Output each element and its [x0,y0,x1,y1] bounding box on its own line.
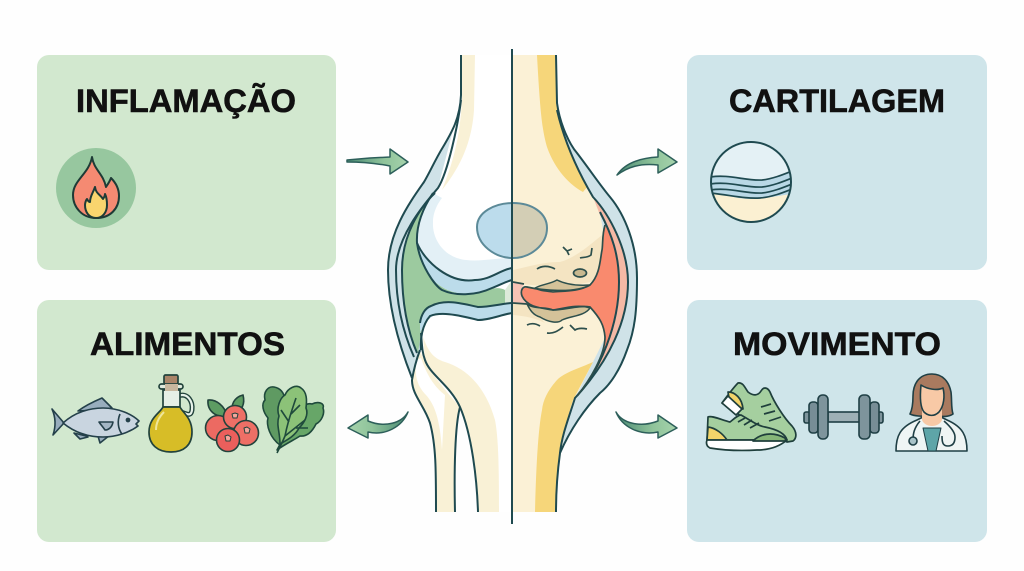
joint diagram [388,49,637,524]
joint space pink [513,282,526,303]
left half: healthy joint [388,55,512,512]
icon: flame [56,148,136,228]
panel: alimentos [37,300,336,542]
healthy femur [417,55,512,281]
fibula [412,350,460,512]
center divider [511,49,513,524]
bone shading [513,235,602,323]
pale synovium band [575,197,628,398]
icon: olive oil bottle [149,375,192,452]
heading: cartilagem: CARTILAGEM [729,83,945,119]
heading: movimento: MOVIMENTO [733,326,941,362]
arrow: inflamação to joint [347,149,408,174]
synovial green area [402,190,505,353]
panel: cartilagem [687,55,987,270]
healthy capsule [388,55,461,378]
inflamed synovium [521,225,619,396]
right half: arthritic joint [513,55,637,512]
yellow marrow stripes [537,55,587,192]
arthritic outlines [556,55,637,512]
arthritic capsule [556,55,637,512]
arrow: joint to alimentos [348,412,408,438]
panel: inflamação [37,55,336,270]
heading: inflamação: INFLAMAÇÃO [76,82,296,119]
healthy tibia [421,313,512,512]
patella [477,203,547,258]
panel: movimento [687,300,987,542]
icon: cartilage sphere [710,140,792,225]
icon: spinach leaves [263,386,324,453]
arthritic bone [513,55,605,512]
icon: fish [52,398,139,443]
healthy outlines [388,55,512,512]
arrow: joint to movimento [616,412,677,438]
femur cartilage [417,243,512,294]
icon: doctor [896,374,967,451]
icon: berries [206,395,258,452]
heading: alimentos: ALIMENTOS [90,326,285,362]
tibia cartilage [420,302,512,333]
arrow: joint to cartilagem [617,149,677,175]
icon: dumbbell [804,395,883,439]
bone erosion patches [535,280,590,292]
icon: running shoes [706,383,796,450]
femur shading [442,55,475,190]
